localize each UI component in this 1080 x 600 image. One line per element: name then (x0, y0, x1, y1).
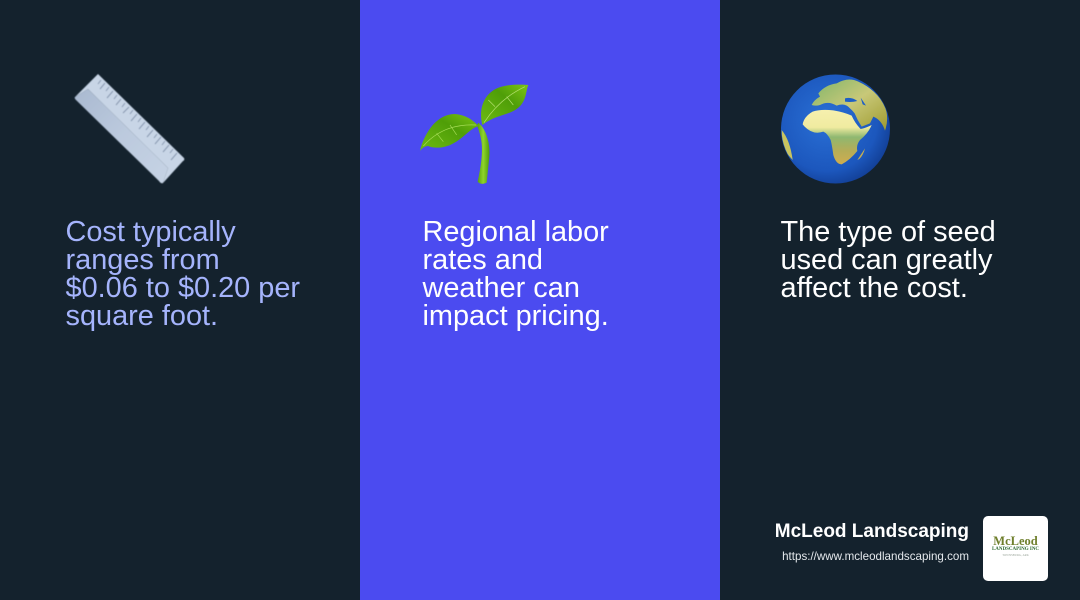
logo wordmark (992, 534, 1039, 557)
logo wordmark: TOWNSBURG, ARK (1002, 553, 1029, 557)
text: labor and weather: impact pricing. (422, 300, 609, 332)
text: seed type: The type of seed (780, 216, 996, 248)
text: cost range: $0.06 to $0.20 per (66, 272, 300, 304)
logo wordmark: McLeod (993, 534, 1038, 548)
text: labor and weather: rates and (422, 244, 543, 276)
text: cost range: Cost typically (66, 216, 236, 248)
text: cost range: square foot. (66, 300, 218, 332)
icon: ruler (74, 74, 185, 184)
logo wordmark: LANDSCAPING INC (992, 547, 1039, 552)
icon: seedling (420, 84, 528, 184)
text: cost range (66, 216, 300, 332)
panel: seed type (776, 74, 1048, 581)
brand name: McLeod Landscaping (775, 521, 969, 542)
text: cost range: ranges from (66, 244, 220, 276)
text: labor and weather (422, 216, 609, 332)
panel: labor and weather (360, 0, 720, 600)
text: seed type: used can greatly (780, 244, 992, 276)
text: seed type: affect the cost. (780, 272, 968, 304)
panel: cost range (0, 0, 360, 600)
text: seed type (780, 216, 996, 304)
icon: globe (781, 74, 890, 184)
logo card (983, 516, 1048, 581)
text: labor and weather: Regional labor (422, 216, 609, 248)
brand url: https://www.mcleodlandscaping.com (782, 550, 969, 563)
text: labor and weather: weather can (422, 272, 580, 304)
